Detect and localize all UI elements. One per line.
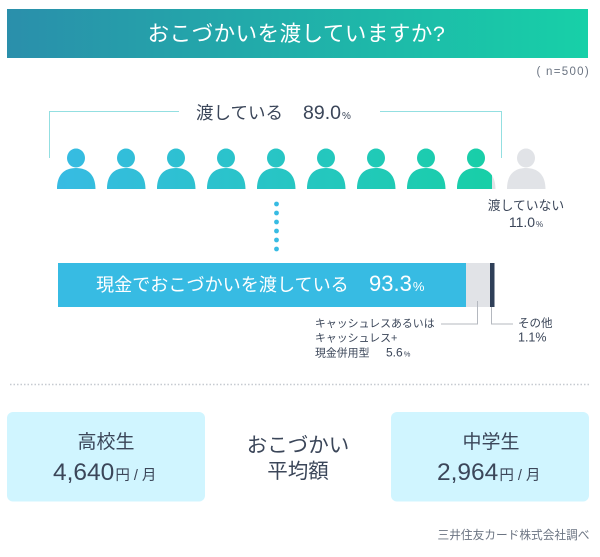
person icon 1 xyxy=(57,148,96,189)
heading: average allowance xyxy=(247,434,349,483)
panel: junior high students: 2,964円 / 月 xyxy=(437,459,540,486)
title banner xyxy=(7,9,588,58)
callout: cashless 5.6%: キャッシュレス+ xyxy=(315,332,397,344)
pictogram: ten people, 89% coloured xyxy=(57,148,546,189)
panel: high school students: 高校生 xyxy=(77,431,135,453)
panel: junior high students xyxy=(391,412,589,502)
stacked bar: payment method: 現金でおこづかいを渡している xyxy=(96,275,349,295)
person icon 10: grey xyxy=(507,148,546,189)
label: gives allowance 89.0%: % xyxy=(342,111,351,122)
heading: average allowance: 平均額 xyxy=(267,460,329,483)
leader line: other xyxy=(492,307,513,324)
callout: cashless 5.6%: 5.6 xyxy=(386,346,403,360)
callout: cashless 5.6% xyxy=(315,317,435,360)
person icon 3 xyxy=(157,148,196,189)
dotted connector xyxy=(274,202,279,251)
person icon 4 xyxy=(207,148,246,189)
heading: average allowance: おこづかい xyxy=(247,434,349,457)
label: gives allowance 89.0%: 89.0 xyxy=(303,102,341,124)
callout: other 1.1%: 1.1% xyxy=(518,330,546,344)
label: gives allowance 89.0%: 渡している xyxy=(196,103,283,123)
title banner: おこづかいを渡していますか? xyxy=(148,22,445,46)
callout: cashless 5.6%: % xyxy=(404,350,411,358)
stacked bar: payment method: 93.3 xyxy=(369,271,412,296)
section divider xyxy=(10,384,589,386)
person icon 5 xyxy=(257,148,296,189)
person icon 6 xyxy=(307,148,346,189)
panel: high school students: 4,640円 / 月 xyxy=(53,459,156,486)
person icon 8 xyxy=(407,148,446,189)
label: does not give allowance 11.0%: 11.0% xyxy=(509,214,543,230)
callout: other 1.1%: その他 xyxy=(518,317,553,330)
callout: cashless 5.6%: 現金併用型 xyxy=(315,348,369,360)
person icon 2 xyxy=(107,148,146,189)
stacked bar: payment method xyxy=(58,263,494,307)
label: does not give allowance 11.0%: 渡していない xyxy=(488,198,564,213)
person icon 7 xyxy=(357,148,396,189)
sample size note: ( n=500) xyxy=(536,66,590,78)
source note: 三井住友カード株式会社調べ xyxy=(438,528,590,542)
leader line: cashless xyxy=(441,301,478,324)
bracket: gives allowance xyxy=(50,112,502,158)
callout: cashless 5.6%: キャッシュレスあるいは xyxy=(315,317,435,330)
label: does not give allowance 11.0% xyxy=(488,198,564,230)
callout: other 1.1% xyxy=(518,317,553,344)
panel: high school students xyxy=(7,412,205,502)
person icon 9: partly filled xyxy=(457,148,496,189)
panel: junior high students: 中学生 xyxy=(462,431,520,453)
stacked bar: payment method: % xyxy=(413,279,425,294)
